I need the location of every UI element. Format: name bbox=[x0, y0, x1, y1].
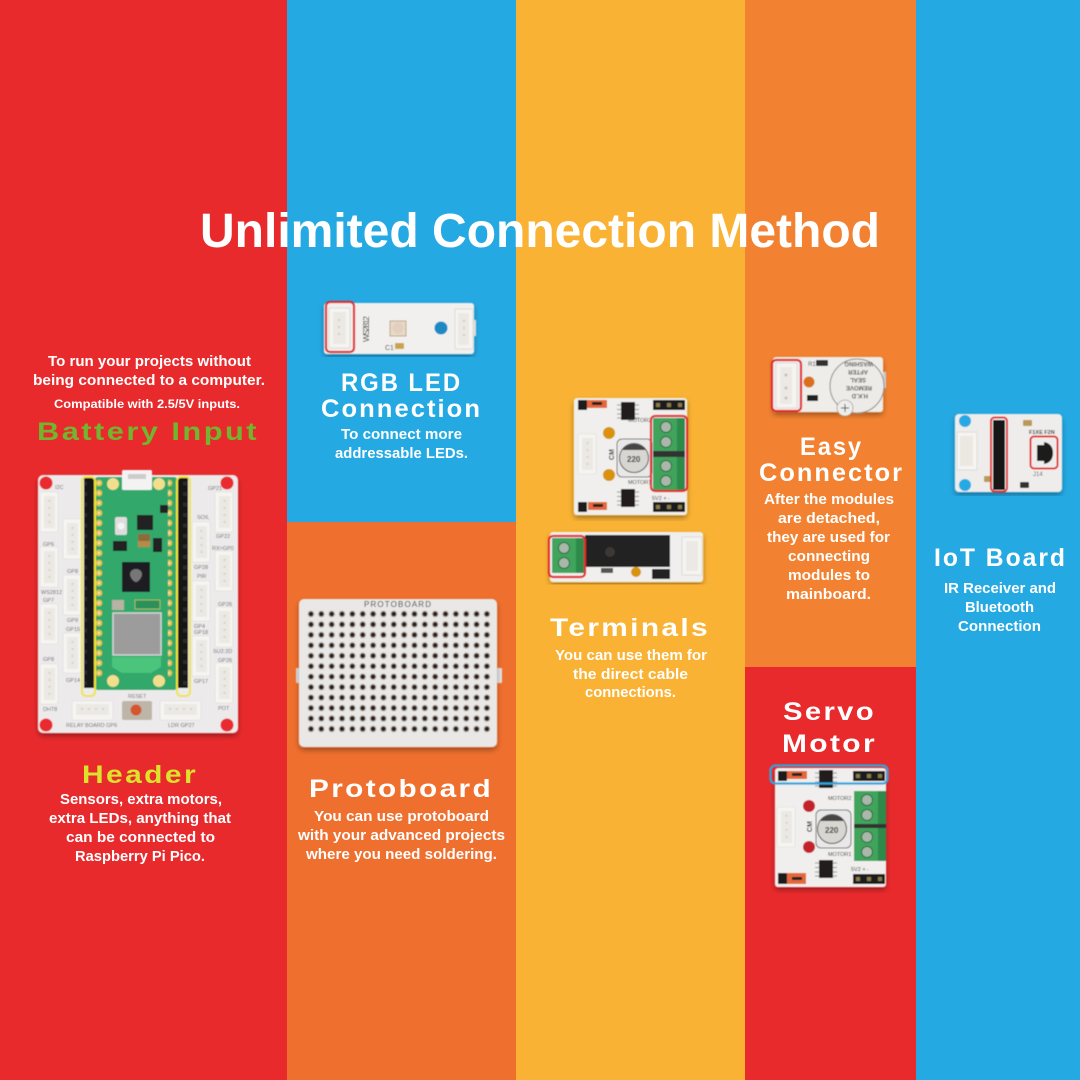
panel: orange protoboard column bottom bbox=[287, 522, 516, 1080]
text block: header description: extra LEDs, anything that bbox=[49, 811, 231, 827]
heading: easy connector: Connector bbox=[759, 459, 904, 487]
icon: Raspberry Pi Pico mainboard: RX=GP0 bbox=[212, 546, 234, 552]
heading: RGB LED connection: RGB LED bbox=[341, 369, 462, 397]
text block: protoboard description bbox=[297, 809, 505, 863]
heading: RGB LED connection: Connection bbox=[321, 395, 482, 423]
text block: protoboard description: You can use protoboard bbox=[314, 809, 489, 825]
icon: Raspberry Pi Pico mainboard: RELAY BOARD GP6 bbox=[66, 723, 117, 729]
icon: buzzer module: R1 bbox=[808, 362, 816, 368]
icon: Raspberry Pi Pico mainboard: GP18 bbox=[194, 630, 208, 636]
panel: red left column bbox=[0, 0, 287, 1080]
panel: red servo motor column bottom bbox=[745, 667, 916, 1080]
icon: Raspberry Pi Pico mainboard: GP21 bbox=[208, 486, 222, 492]
heading: battery input: Battery Input bbox=[37, 418, 259, 446]
icon: Raspberry Pi Pico mainboard: GP7 bbox=[43, 598, 54, 604]
icon: servo motor driver module: MOTOR2 bbox=[828, 796, 851, 802]
icon: Raspberry Pi Pico mainboard bbox=[38, 470, 238, 733]
icon: WS2812 RGB LED module: C1 bbox=[385, 345, 394, 352]
icon: Raspberry Pi Pico mainboard: GP8 bbox=[43, 657, 54, 663]
text block: easy connector description: After the modules bbox=[764, 492, 894, 508]
icon: Raspberry Pi Pico mainboard: PIR bbox=[197, 574, 206, 580]
text block: terminals description: You can use them for bbox=[555, 648, 707, 664]
text block: terminals description: the direct cable bbox=[573, 667, 688, 683]
heading: servo motor: Motor bbox=[782, 730, 877, 758]
title: Unlimited Connection Method bbox=[200, 205, 880, 258]
icon: Raspberry Pi Pico mainboard: GP22 bbox=[216, 534, 230, 540]
panel: yellow terminals column bbox=[516, 0, 745, 1080]
icon: Raspberry Pi Pico mainboard: I2C bbox=[55, 485, 64, 491]
icon: servo motor driver module: 220 bbox=[825, 826, 839, 835]
text block: battery description: being connected to a computer. bbox=[33, 373, 265, 389]
icon: Raspberry Pi Pico mainboard: GP6 bbox=[43, 542, 54, 548]
icon: IoT board module: J14 bbox=[1033, 472, 1043, 478]
icon: servo motor driver module: MOTOR1 bbox=[828, 852, 851, 858]
text block: terminals description bbox=[555, 648, 707, 701]
text block: battery description bbox=[33, 354, 265, 411]
text block: IoT board description: IR Receiver and bbox=[944, 581, 1056, 597]
icon: buzzer module: H.K.D bbox=[851, 392, 868, 398]
panel: blue IoT board column bbox=[916, 0, 1080, 1080]
icon: IoT board module: F1XE F2N bbox=[1029, 430, 1055, 436]
icon: Raspberry Pi Pico mainboard: DHT8 bbox=[43, 707, 57, 713]
icon: protoboard module bbox=[296, 599, 502, 747]
text block: header description: can be connected to bbox=[66, 830, 215, 846]
icon: motor driver module with terminals: CM bbox=[609, 449, 616, 460]
icon: buzzer module: SEAL bbox=[850, 376, 866, 382]
icon: Raspberry Pi Pico mainboard: GP15 bbox=[66, 627, 80, 633]
heading: terminals: Terminals bbox=[550, 614, 710, 642]
icon: motor driver module with terminals: 220 bbox=[627, 455, 641, 464]
icon: Raspberry Pi Pico mainboard: GP8 bbox=[67, 569, 78, 575]
icon: WS2812 RGB LED module: WS2812 bbox=[361, 316, 371, 342]
icon: buzzer module: WASHING bbox=[844, 360, 873, 366]
icon: motor driver module with terminals: MOTOR2 bbox=[628, 418, 651, 424]
panel: blue RGB LED column top bbox=[287, 0, 516, 522]
text block: RGB description: To connect more bbox=[341, 427, 462, 443]
text block: header description: Raspberry Pi Pico. bbox=[75, 849, 205, 865]
text block: header description: Sensors, extra motors, bbox=[60, 792, 222, 808]
icon: buzzer module: AFTER bbox=[847, 368, 868, 374]
icon: motor driver module with terminals: 5V2 + - bbox=[652, 496, 670, 502]
text block: protoboard description: where you need soldering. bbox=[305, 847, 497, 863]
icon: Raspberry Pi Pico mainboard: GP26 bbox=[218, 658, 232, 664]
heading: protoboard: Protoboard bbox=[309, 775, 493, 803]
icon: Raspberry Pi Pico mainboard: RESET bbox=[128, 694, 147, 700]
heading: easy connector bbox=[759, 433, 904, 487]
text block: easy connector description bbox=[764, 492, 894, 603]
text block: IoT board description: Bluetooth bbox=[965, 600, 1034, 616]
text block: easy connector description: modules to bbox=[788, 568, 870, 584]
heading: RGB LED connection bbox=[321, 369, 482, 423]
icon: servo motor driver module bbox=[770, 766, 888, 887]
text block: terminals description: connections. bbox=[585, 685, 676, 701]
icon: Raspberry Pi Pico mainboard: LDR GP27 bbox=[168, 723, 195, 729]
icon: Raspberry Pi Pico mainboard: POT bbox=[218, 706, 230, 712]
text block: easy connector description: they are used for bbox=[767, 530, 890, 546]
text block: RGB description bbox=[335, 427, 468, 462]
icon: protoboard module: PROTOBOARD bbox=[364, 600, 431, 609]
text block: header description bbox=[49, 792, 231, 865]
text block: battery description: Compatible with 2.5/5V inputs. bbox=[54, 397, 240, 411]
icon: Raspberry Pi Pico mainboard: GP4 bbox=[194, 624, 205, 630]
heading: IoT board: IoT Board bbox=[934, 544, 1067, 572]
icon: relay module with terminal bbox=[549, 532, 703, 582]
icon: Raspberry Pi Pico mainboard: WS2812 bbox=[41, 590, 62, 596]
heading: header: Header bbox=[82, 761, 198, 789]
icon: Raspberry Pi Pico mainboard: GP28 bbox=[194, 565, 208, 571]
heading: easy connector: Easy bbox=[800, 433, 863, 461]
icon: WS2812 RGB LED module bbox=[324, 302, 476, 354]
text block: easy connector description: are detached, bbox=[778, 511, 880, 527]
icon: Raspberry Pi Pico mainboard: GP26 bbox=[218, 602, 232, 608]
text block: easy connector description: mainboard. bbox=[786, 587, 871, 603]
icon: Raspberry Pi Pico mainboard: SOIL bbox=[197, 515, 210, 521]
heading: servo motor bbox=[782, 698, 877, 758]
text block: easy connector description: connecting bbox=[788, 549, 870, 565]
icon: buzzer module: REMOVE bbox=[846, 384, 872, 390]
icon: Raspberry Pi Pico mainboard: GP17 bbox=[194, 679, 208, 685]
text block: IoT board description: Connection bbox=[958, 619, 1041, 635]
heading: servo motor: Servo bbox=[783, 698, 876, 726]
text block: IoT board description bbox=[944, 581, 1056, 635]
text block: protoboard description: with your advanced projects bbox=[297, 828, 505, 844]
icon: Raspberry Pi Pico mainboard: SU2:2D bbox=[213, 649, 232, 655]
icon: Raspberry Pi Pico mainboard: GP14 bbox=[66, 678, 80, 684]
text block: RGB description: addressable LEDs. bbox=[335, 446, 468, 462]
panel: orange easy connector column top bbox=[745, 0, 916, 667]
icon: servo motor driver module: 5V2 + - bbox=[851, 867, 869, 873]
icon: motor driver module with terminals: MOTOR1 bbox=[628, 480, 651, 486]
icon: IoT board module bbox=[955, 414, 1062, 492]
icon: buzzer module bbox=[772, 357, 886, 416]
icon: servo motor driver module: CM bbox=[807, 821, 814, 832]
text block: battery description: To run your projects without bbox=[48, 354, 251, 370]
icon: Raspberry Pi Pico mainboard: GP9 bbox=[67, 618, 78, 624]
icon: motor driver module with terminals bbox=[574, 398, 687, 515]
